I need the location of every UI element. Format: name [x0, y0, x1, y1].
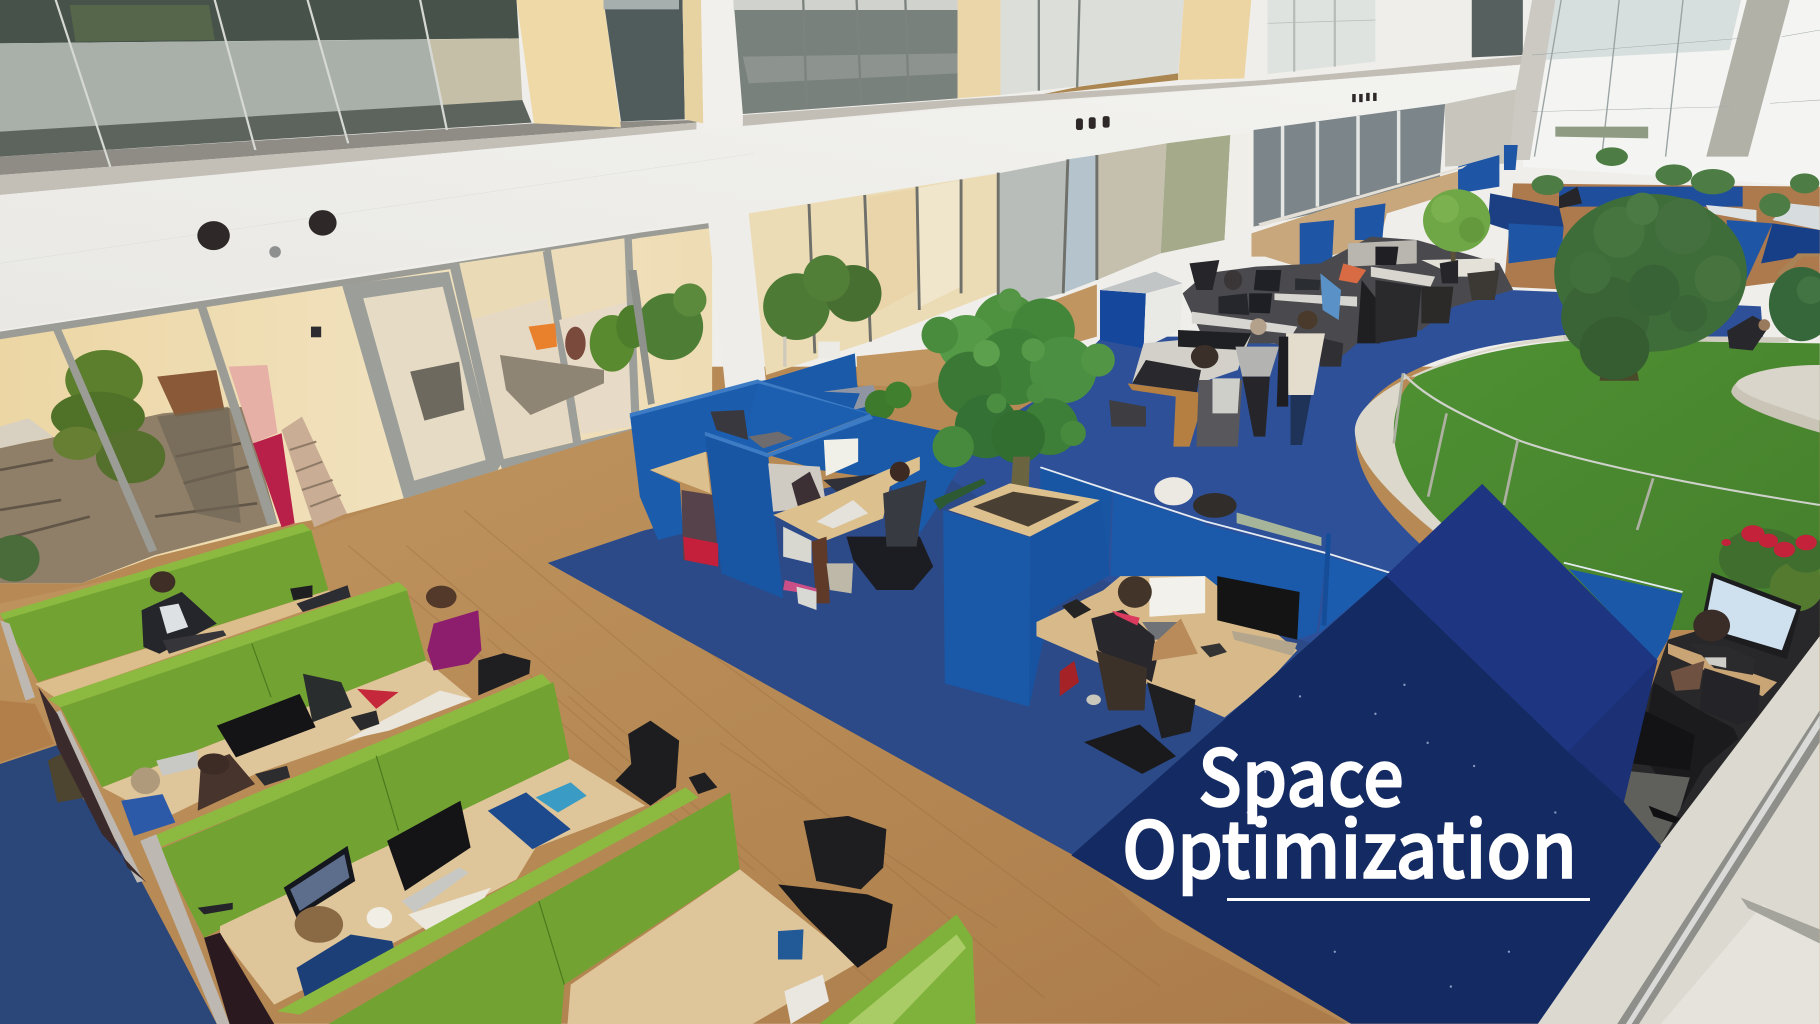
standing people and meeting table [1109, 311, 1325, 447]
title line 2: Optimization [1122, 789, 1577, 901]
upper floor and wall (units: y scaled) [0, 0, 1820, 367]
back counter with blue panels [1251, 170, 1463, 267]
central workstation cluster [1183, 237, 1513, 367]
blue cubicles, centre [628, 255, 973, 610]
tall planter with tree [921, 288, 1115, 707]
navy pyramid background shapes [1071, 484, 1661, 1024]
green bench row 1 [0, 523, 351, 701]
blue carpet: centre and curved walkway [548, 290, 1763, 855]
second cubicle back wall [768, 415, 973, 533]
title line 1: Space [1198, 717, 1404, 829]
wood floor [0, 427, 1346, 1024]
green bench row 3 [140, 674, 717, 1024]
title: Space Optimization [1122, 717, 1577, 901]
lawn with curb and railing [1355, 335, 1820, 630]
trees in the atrium [1423, 189, 1820, 381]
person on lawn [1727, 316, 1770, 351]
blue carpet lower left [0, 744, 217, 1024]
desk with person and laptop [1036, 576, 1300, 774]
ground floor meeting room, left [0, 223, 712, 583]
far back workstations [1251, 145, 1820, 297]
interior trees [636, 255, 881, 360]
tree: far right edge [1769, 267, 1820, 341]
wood floor grain [348, 511, 1161, 1010]
fern tree canopy [921, 288, 1115, 467]
green bench row 2 [38, 582, 531, 883]
blue kiosk [1100, 272, 1183, 348]
tree: large right [1554, 193, 1747, 381]
tree: back centre [1423, 189, 1490, 261]
atrium glazing far right [1523, 0, 1820, 187]
lower-left benching workstations [0, 523, 976, 1024]
balcony balustrade, foreground right [1537, 636, 1820, 1024]
green bench row 4 [277, 787, 976, 1024]
blue partition wall, right [1040, 467, 1683, 661]
indoor plant [51, 350, 165, 483]
ground floor rooms, centre [708, 89, 1516, 390]
right desk group [1622, 525, 1820, 846]
panel top edges [1040, 467, 1683, 592]
wall speakers and vents [197, 93, 1377, 258]
title underline [1227, 898, 1590, 901]
